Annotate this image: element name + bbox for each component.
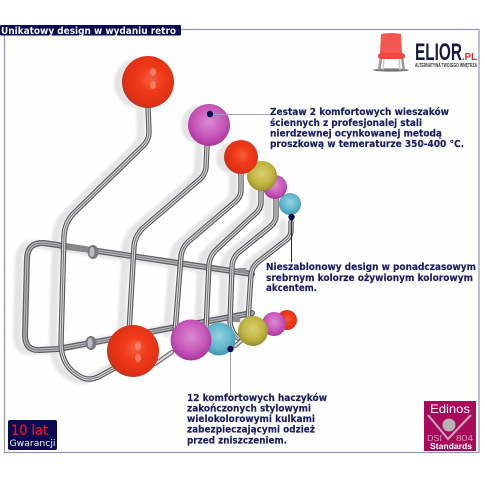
text block: hooks description: zakończonych stylowymi (187, 402, 311, 414)
hooks (61, 108, 291, 379)
lower balls (107, 310, 297, 377)
text block: hooks description: przed zniszczeniem. (187, 436, 287, 446)
badge: 10 lat warranty: 10 lat (11, 423, 48, 439)
text block: hooks description: wielokolorowymi kulkami (187, 414, 315, 425)
logo domain: .PL (462, 52, 477, 63)
rail knobs (60, 243, 246, 350)
callout connector: steel (207, 111, 270, 117)
rack shadows (17, 58, 283, 380)
text block: steel description: Zestaw 2 komfortowych wieszaków (270, 106, 449, 118)
text block: hooks description: zabezpieczającymi odzież (187, 424, 315, 436)
badge: Edinos standards (424, 401, 476, 451)
text block: steel description: nierdzewnej ocynkowanej metodą (270, 128, 442, 140)
text block: hooks description: 12 komfortowych haczyków (187, 392, 327, 404)
text block: steel description (270, 106, 464, 150)
text block: steel description: proszkową w temeraturze 350-400 °C. (270, 139, 464, 150)
callout connector: hooks (227, 346, 234, 396)
badge: 10 lat warranty (8, 420, 57, 450)
product photo: wall coat rack (17, 56, 301, 380)
text block: design description (266, 262, 476, 294)
rails (25, 243, 252, 364)
icon: red chair (373, 33, 409, 72)
badge: Edinos standards: Standards (430, 442, 473, 451)
badge: Edinos standards: DSI (427, 433, 442, 443)
badge: 10 lat warranty: Gwarancji (10, 439, 56, 449)
text block: hooks description (187, 392, 327, 446)
badge: Edinos standards: Edinos (430, 402, 470, 416)
text block: steel description: ściennych z profesjonalej stali (270, 117, 422, 129)
logo: Elior (373, 33, 477, 72)
upper balls (122, 56, 301, 215)
text block: design description: akcentem. (266, 283, 317, 294)
callout connector: design (288, 214, 295, 262)
badge: Edinos standards: 804 (456, 433, 473, 443)
heading bar: Unikatowy design w wydaniu retro (1, 26, 176, 37)
text block: design description: Nieszablonowy design w ponadczasowym (266, 262, 476, 273)
text block: design description: srebrnym kolorze ożywionym kolorowym (266, 273, 473, 284)
